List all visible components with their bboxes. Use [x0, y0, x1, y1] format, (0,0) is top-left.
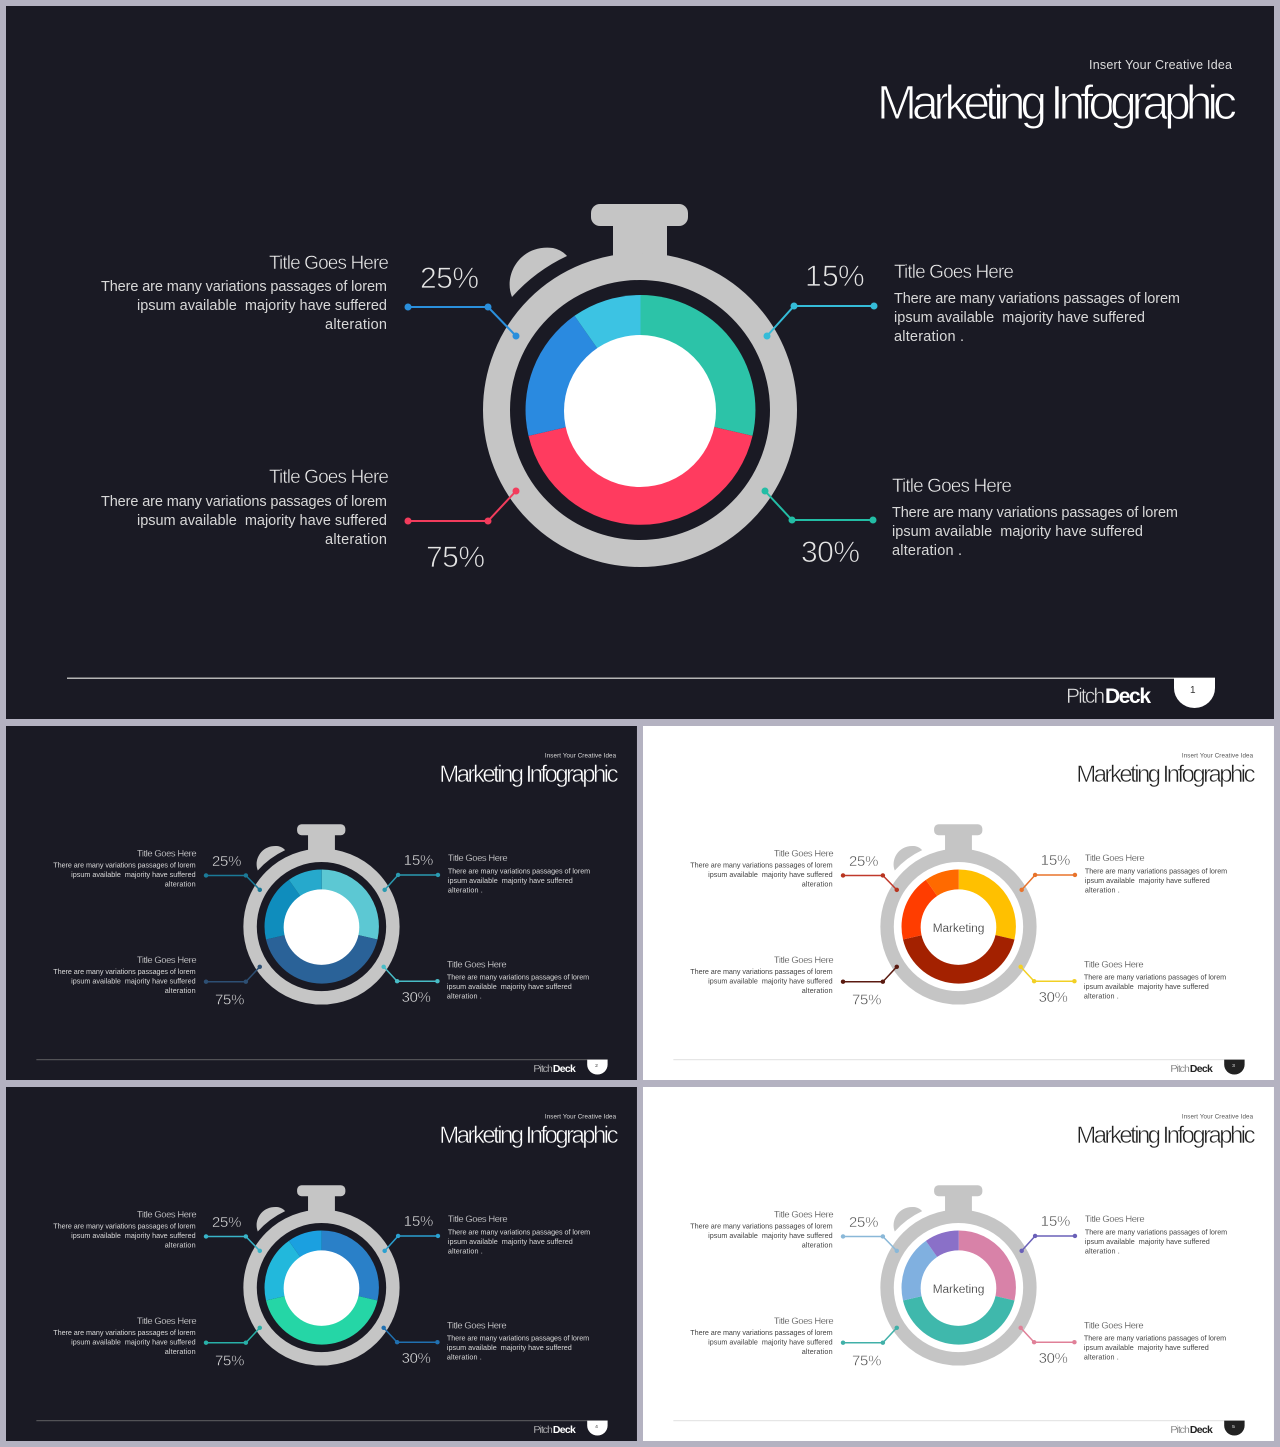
- footer: Deck: [553, 1064, 576, 1075]
- footer: [36, 1059, 608, 1075]
- callout: 75%: alteration: [802, 1347, 833, 1356]
- callout: 75%: 75%: [852, 993, 881, 1009]
- callout: 75%: 75%: [215, 993, 244, 1009]
- callout: 25%: There are many variations passages of lorem: [690, 1222, 833, 1231]
- callout: 30%: [1018, 1320, 1226, 1367]
- callout: 15%: There are many variations passages of lorem: [448, 1227, 590, 1236]
- tagline: Insert Your Creative Idea: [545, 752, 617, 759]
- callout: 15%: There are many variations passages of lorem: [894, 291, 1180, 307]
- panel: pastel light slide: [643, 1087, 1274, 1441]
- callout: 30%: Title Goes Here: [447, 1320, 507, 1331]
- callout: 30%: alteration .: [447, 1353, 482, 1362]
- callout: 15%: There are many variations passages of lorem: [1085, 1227, 1227, 1236]
- callout: 25%: ipsum available majority have suffered: [71, 870, 196, 879]
- footer: [673, 1420, 1245, 1436]
- tagline: Insert Your Creative Idea: [1089, 58, 1232, 72]
- icon: stopwatch: [887, 1185, 1030, 1359]
- callout: 75%: There are many variations passages of lorem: [690, 967, 833, 976]
- callout: 75%: ipsum available majority have suffered: [708, 1338, 833, 1347]
- footer: 1: [1190, 685, 1196, 696]
- callout: 15%: There are many variations passages of lorem: [1085, 866, 1227, 875]
- footer: Pitch: [1170, 1425, 1190, 1436]
- title: Marketing Infographic: [877, 77, 1237, 130]
- callout: 25%: 25%: [849, 1215, 878, 1231]
- callout: 30%: alteration .: [1084, 992, 1119, 1001]
- callout: 25%: Title Goes Here: [269, 253, 389, 274]
- callout: 15%: Title Goes Here: [448, 1214, 508, 1225]
- callout: 15%: alteration .: [1085, 1246, 1120, 1255]
- callout: 30%: ipsum available majority have suffered: [447, 982, 572, 991]
- callout: 75%: Title Goes Here: [269, 467, 389, 488]
- callout: 30%: 30%: [1039, 1351, 1068, 1367]
- callout: 15%: [1019, 853, 1227, 894]
- callout: 30%: There are many variations passages of lorem: [892, 505, 1178, 521]
- callout: 15%: Title Goes Here: [1085, 853, 1145, 864]
- tagline: Insert Your Creative Idea: [1182, 1113, 1254, 1120]
- callout: 75%: [101, 467, 520, 574]
- callout: 30%: [381, 1320, 589, 1367]
- callout: 25%: Title Goes Here: [774, 1210, 834, 1221]
- callout: 25%: [53, 849, 262, 892]
- footer: Deck: [1105, 685, 1151, 708]
- callout: 75%: ipsum available majority have suffered: [71, 977, 196, 986]
- footer: 5: [1232, 1424, 1235, 1430]
- callout: 30%: ipsum available majority have suffered: [892, 524, 1143, 540]
- panel: main dark slide: [6, 6, 1274, 719]
- callout: 25%: 25%: [212, 1215, 241, 1231]
- callout: 15%: Title Goes Here: [1085, 1214, 1145, 1225]
- callout: 30%: ipsum available majority have suffered: [1084, 982, 1209, 991]
- footer: Deck: [553, 1425, 576, 1436]
- callout: 30%: Title Goes Here: [1084, 1320, 1144, 1331]
- callout: 15%: alteration .: [448, 885, 483, 894]
- icon: stopwatch: [887, 824, 1030, 998]
- callout: 25%: Title Goes Here: [137, 1210, 197, 1221]
- callout: 15%: [764, 260, 1180, 345]
- callout: 30%: Title Goes Here: [1084, 959, 1144, 970]
- panel: orange light slide: [643, 726, 1274, 1080]
- footer: [673, 1059, 1245, 1075]
- footer: Pitch: [1066, 685, 1105, 708]
- footer: Pitch: [1170, 1064, 1190, 1075]
- callout: 15%: ipsum available majority have suffered: [1085, 1237, 1210, 1246]
- footer: 3: [1232, 1063, 1235, 1069]
- panel: blue dark slide: [6, 726, 637, 1080]
- callout: 15%: ipsum available majority have suffered: [448, 876, 573, 885]
- callout: 15%: [382, 1214, 590, 1255]
- callout: 15%: ipsum available majority have suffered: [448, 1237, 573, 1246]
- callout: 25%: [53, 1210, 262, 1253]
- callout: 25%: alteration: [802, 1240, 833, 1249]
- tagline: Insert Your Creative Idea: [1182, 752, 1254, 759]
- callout: 75%: Title Goes Here: [137, 1316, 197, 1327]
- callout: 30%: alteration .: [1084, 1353, 1119, 1362]
- icon: stopwatch: [250, 824, 393, 998]
- callout: 25%: alteration: [802, 879, 833, 888]
- callout: 25%: [690, 849, 899, 892]
- callout: 25%: There are many variations passages of lorem: [53, 861, 196, 870]
- footer: Pitch: [533, 1425, 553, 1436]
- footer: Deck: [1190, 1425, 1213, 1436]
- callout: 25%: ipsum available majority have suffered: [708, 870, 833, 879]
- callout: 75%: ipsum available majority have suffered: [137, 513, 387, 529]
- callout: 75%: 75%: [426, 541, 485, 574]
- callout: 25%: ipsum available majority have suffered: [137, 298, 387, 314]
- callout: 15%: 15%: [1041, 853, 1070, 869]
- title: Marketing Infographic: [439, 761, 619, 788]
- title: Marketing Infographic: [1076, 1122, 1256, 1149]
- callout: 15%: There are many variations passages of lorem: [448, 866, 590, 875]
- callout: 75%: 75%: [215, 1354, 244, 1370]
- callout: 15%: alteration .: [894, 329, 964, 345]
- callout: 75%: [53, 955, 262, 1009]
- callout: 25%: Title Goes Here: [137, 849, 197, 860]
- callout: 75%: [690, 1316, 899, 1370]
- callout: 30%: ipsum available majority have suffered: [1084, 1343, 1209, 1352]
- callout: 30%: [762, 476, 1178, 569]
- callout: 15%: alteration .: [1085, 885, 1120, 894]
- callout: 30%: 30%: [1039, 990, 1068, 1006]
- callout: 30%: [1018, 959, 1226, 1006]
- callout: 25%: Title Goes Here: [774, 849, 834, 860]
- footer: [36, 1420, 608, 1436]
- callout: 25%: alteration: [325, 317, 387, 333]
- callout: 15%: 15%: [805, 260, 865, 293]
- callout: 75%: Title Goes Here: [137, 955, 197, 966]
- callout: 15%: [1019, 1214, 1227, 1255]
- icon: stopwatch: [496, 204, 784, 554]
- callout: 25%: [690, 1210, 899, 1253]
- callout: 30%: There are many variations passages of lorem: [447, 1334, 589, 1343]
- callout: 30%: Title Goes Here: [447, 959, 507, 970]
- callout: 15%: [382, 853, 590, 894]
- callout: 75%: [690, 955, 899, 1009]
- callout: 75%: ipsum available majority have suffered: [708, 977, 833, 986]
- callout: 15%: Title Goes Here: [894, 262, 1014, 283]
- callout: 25%: 25%: [212, 854, 241, 870]
- callout: 30%: There are many variations passages of lorem: [1084, 1334, 1226, 1343]
- callout: 30%: ipsum available majority have suffered: [447, 1343, 572, 1352]
- callout: 75%: alteration: [165, 1347, 196, 1356]
- callout: 25%: ipsum available majority have suffered: [708, 1231, 833, 1240]
- footer: Pitch: [533, 1064, 553, 1075]
- icon: stopwatch: [250, 1185, 393, 1359]
- callout: 75%: There are many variations passages of lorem: [690, 1328, 833, 1337]
- callout: 25%: ipsum available majority have suffered: [71, 1231, 196, 1240]
- callout: 30%: alteration .: [447, 992, 482, 1001]
- callout: 75%: Title Goes Here: [774, 955, 834, 966]
- callout: 15%: ipsum available majority have suffered: [1085, 876, 1210, 885]
- callout: 25%: 25%: [849, 854, 878, 870]
- callout: 75%: ipsum available majority have suffered: [71, 1338, 196, 1347]
- callout: 30%: There are many variations passages of lorem: [447, 973, 589, 982]
- callout: 25%: There are many variations passages of lorem: [53, 1222, 196, 1231]
- callout: 25%: There are many variations passages of lorem: [690, 861, 833, 870]
- callout: 75%: Title Goes Here: [774, 1316, 834, 1327]
- footer: 4: [595, 1424, 598, 1430]
- callout: 30%: There are many variations passages of lorem: [1084, 973, 1226, 982]
- callout: 25%: alteration: [165, 879, 196, 888]
- callout: 15%: 15%: [1041, 1214, 1070, 1230]
- callout: 25%: [101, 253, 520, 340]
- callout: 75%: There are many variations passages of lorem: [53, 967, 196, 976]
- callout: 25%: There are many variations passages of lorem: [101, 279, 387, 295]
- callout: 75%: alteration: [165, 986, 196, 995]
- callout: 25%: alteration: [165, 1240, 196, 1249]
- center label: Marketing: [933, 1282, 984, 1296]
- footer: [67, 678, 1215, 708]
- callout: 75%: There are many variations passages of lorem: [53, 1328, 196, 1337]
- callout: 30%: 30%: [402, 990, 431, 1006]
- callout: 30%: Title Goes Here: [892, 476, 1012, 497]
- callout: 30%: [381, 959, 589, 1006]
- callout: 75%: alteration: [802, 986, 833, 995]
- tagline: Insert Your Creative Idea: [545, 1113, 617, 1120]
- title: Marketing Infographic: [1076, 761, 1256, 788]
- callout: 30%: 30%: [801, 536, 860, 569]
- callout: 75%: alteration: [325, 532, 387, 548]
- callout: 75%: There are many variations passages of lorem: [101, 494, 387, 510]
- callout: 15%: 15%: [404, 1214, 433, 1230]
- callout: 30%: alteration .: [892, 543, 962, 559]
- callout: 75%: [53, 1316, 262, 1370]
- callout: 30%: 30%: [402, 1351, 431, 1367]
- callout: 15%: ipsum available majority have suffered: [894, 310, 1145, 326]
- callout: 75%: 75%: [852, 1354, 881, 1370]
- callout: 15%: alteration .: [448, 1246, 483, 1255]
- callout: 25%: 25%: [420, 262, 479, 295]
- callout: 15%: 15%: [404, 853, 433, 869]
- footer: Deck: [1190, 1064, 1213, 1075]
- panel: teal dark slide: [6, 1087, 637, 1441]
- center label: Marketing: [933, 921, 984, 935]
- title: Marketing Infographic: [439, 1122, 619, 1149]
- callout: 15%: Title Goes Here: [448, 853, 508, 864]
- footer: 2: [595, 1063, 598, 1069]
